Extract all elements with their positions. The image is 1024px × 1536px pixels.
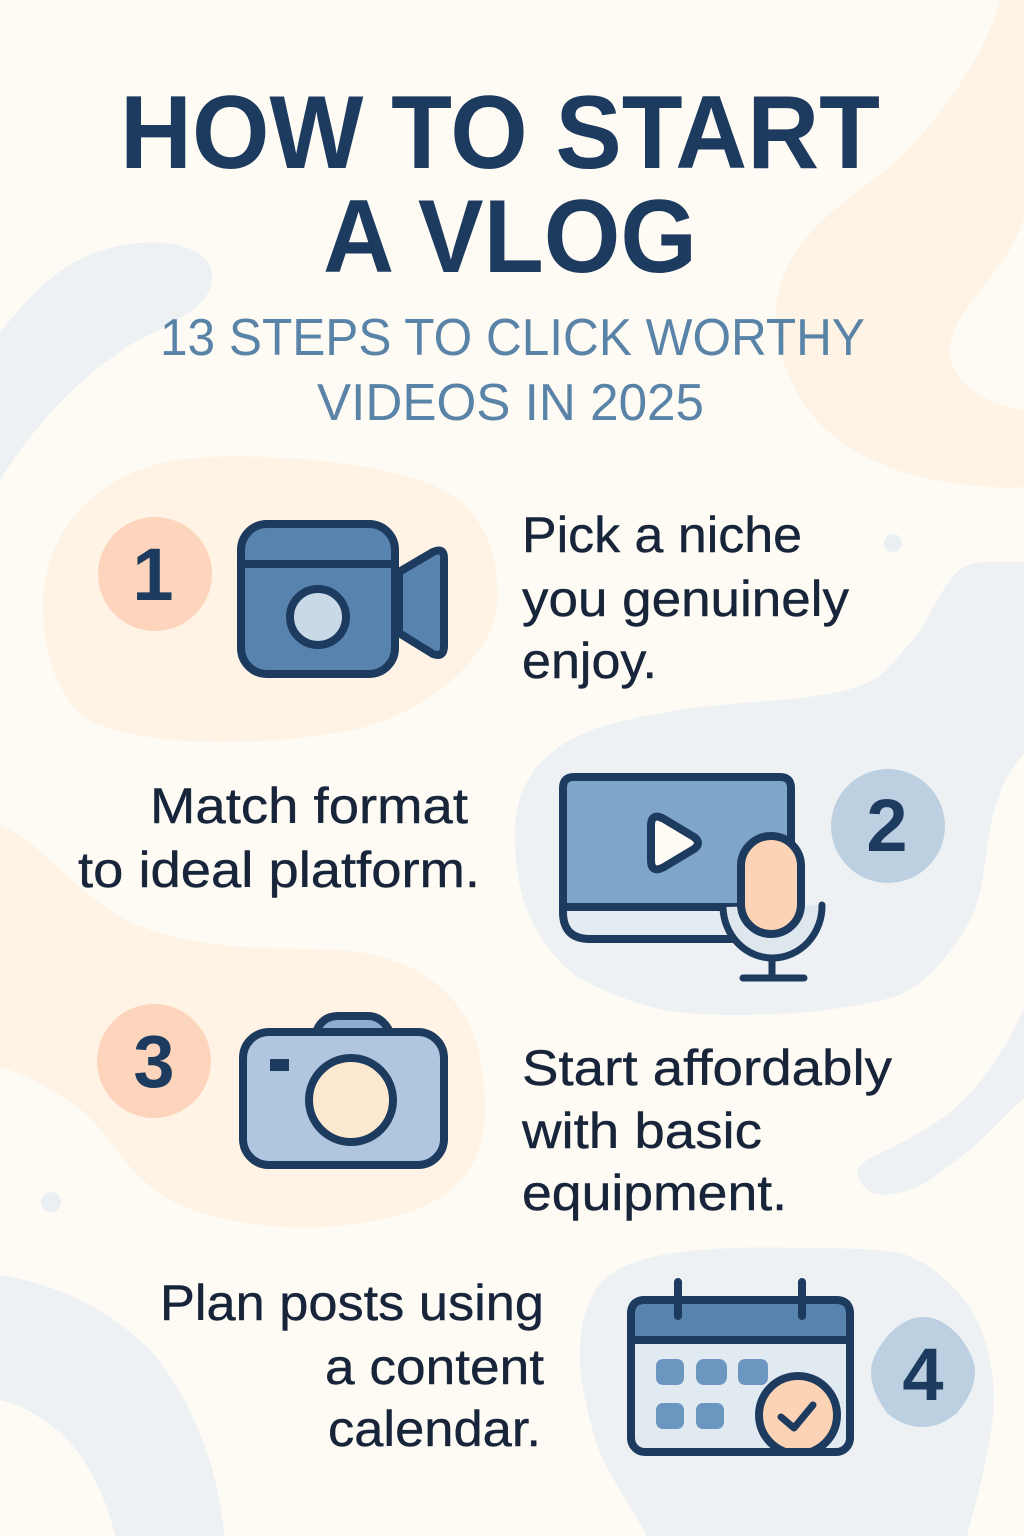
step 3 text: equipment.	[522, 1165, 787, 1221]
background blob: step 4 blue	[580, 1247, 994, 1536]
background blob: step 2 blue	[515, 562, 1024, 1015]
background blob: step 3 orange	[0, 825, 485, 1227]
step 4 text: a content	[325, 1339, 544, 1395]
step 2 text	[78, 778, 480, 898]
step 3 number badge	[97, 1004, 211, 1118]
step 1 text: enjoy.	[522, 633, 657, 689]
background blob: lower left blue	[0, 1275, 224, 1536]
step 4 text	[160, 1275, 544, 1457]
subtitle: 13 STEPS TO CLICK WORTHY	[160, 309, 865, 367]
title: HOW TO START	[120, 75, 880, 191]
step 3 text	[521, 1040, 892, 1221]
step 2 text: to ideal platform.	[78, 842, 480, 898]
decorative dot upper	[884, 534, 902, 552]
background blob: upper left blue	[0, 242, 212, 480]
step 1 number badge	[98, 517, 212, 631]
step 4 number badge	[871, 1317, 975, 1427]
step 3 text: Start affordably	[522, 1040, 892, 1096]
step 4 number badge: 4	[902, 1333, 944, 1416]
icon: calendar with check badge	[631, 1282, 850, 1454]
step 2 text: Match format	[150, 778, 468, 834]
background blob: step 1 orange	[43, 457, 498, 742]
step 1 text	[522, 507, 849, 689]
title: A VLOG	[323, 179, 697, 295]
step 3 number badge: 3	[133, 1020, 175, 1103]
subtitle: VIDEOS IN 2025	[317, 374, 704, 432]
step 3 text: with basic	[521, 1103, 762, 1159]
step 2 number badge: 2	[866, 784, 908, 867]
title	[120, 75, 880, 295]
step 2 number badge	[831, 769, 945, 883]
step 4 text: Plan posts using	[160, 1275, 544, 1331]
subtitle	[160, 309, 865, 432]
decorative dot lower	[41, 1192, 61, 1212]
background blob: right tail blue	[857, 1009, 1024, 1195]
step 4 text: calendar.	[328, 1401, 541, 1457]
icon: video camera	[241, 524, 444, 674]
step 1 text: you genuinely	[522, 571, 849, 627]
step 1 text: Pick a niche	[522, 507, 802, 563]
icon: video screen with microphone	[563, 777, 822, 978]
background blob: top right orange	[776, 0, 1024, 487]
step 1 number badge: 1	[132, 533, 174, 616]
icon: photo camera	[243, 1016, 444, 1165]
